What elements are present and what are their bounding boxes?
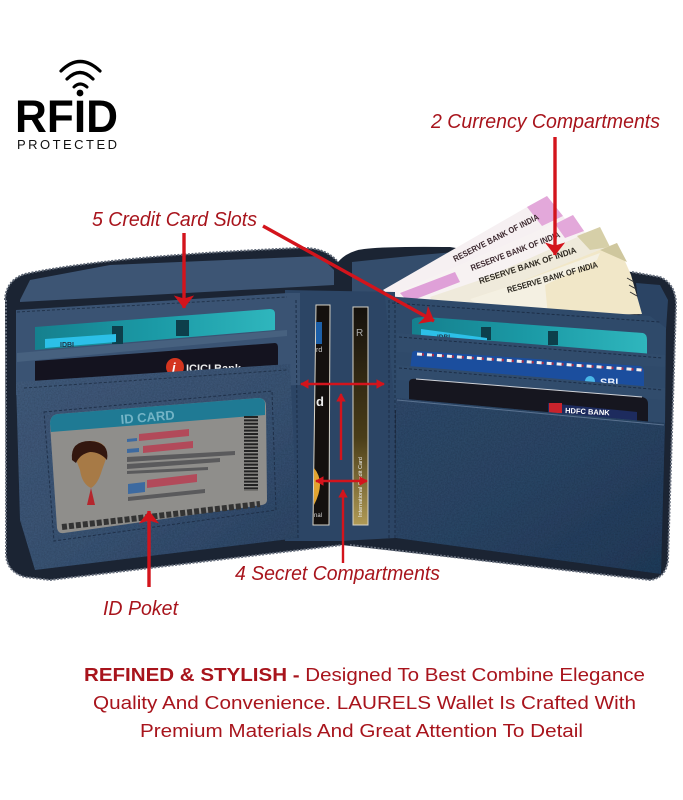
card: teal credit card	[35, 309, 275, 350]
panel: right card slots	[385, 296, 666, 425]
wallet illustration	[5, 196, 676, 580]
label: ID Poket: ID Poket	[103, 598, 179, 620]
label: 4 Secret Compartments: 4 Secret Compartments	[235, 563, 440, 585]
card: black ICICI card: i	[172, 360, 176, 375]
card: teal credit card	[412, 317, 647, 354]
secret compartment card left: nal	[314, 513, 322, 519]
currency notes	[383, 196, 642, 318]
card: black ICICI card: ICICI Bank	[186, 363, 242, 375]
description text: REFINED & STYLISH - Designed To Best Combine Elegance	[84, 664, 645, 685]
label: 5 Credit Card Slots: 5 Credit Card Slots	[92, 209, 257, 231]
logo: RFID protected: PROTECTED	[17, 137, 117, 152]
description text: Premium Materials And Great Attention To Detail	[140, 720, 583, 741]
arrow: right card slots	[263, 226, 434, 321]
card: blue SBI card	[410, 351, 644, 389]
ID window: ID CARD	[120, 407, 175, 427]
secret compartment card left: d	[316, 394, 324, 409]
currency notes: RESERVE BANK OF INDIA	[451, 212, 541, 264]
logo: RFID protected: RFID	[15, 91, 118, 142]
card: teal credit card: IDBI	[437, 334, 450, 341]
ID window	[50, 398, 267, 533]
logo: RFID protected	[15, 62, 118, 152]
arrow: currency	[553, 137, 557, 255]
currency notes: RESERVE BANK OF INDIA	[478, 245, 578, 286]
label: 2 Currency Compartments: 2 Currency Compartments	[430, 111, 660, 133]
description text: Quality And Convenience. LAURELS Wallet Is Crafted With	[93, 692, 636, 713]
panel: inner lining top	[20, 252, 668, 330]
card: black ICICI card	[35, 343, 278, 382]
arrow: ID pocket	[147, 511, 151, 587]
currency notes: RESERVE BANK OF INDIA	[469, 229, 561, 273]
arrow: left card slots	[182, 233, 186, 308]
secret compartment card right: R	[356, 328, 363, 339]
secret compartment card right	[353, 307, 368, 525]
description text	[84, 664, 645, 741]
card: teal credit card: IDBI	[60, 342, 74, 349]
panel: center spine	[285, 290, 396, 541]
panel: left card slots	[16, 293, 300, 395]
card: blue SBI card: SBI	[600, 377, 618, 389]
card: black HDFC card	[409, 379, 648, 422]
panel: right large pocket	[296, 300, 665, 574]
card: black HDFC card: HDFC BANK	[565, 406, 610, 417]
icon: wireless signal	[61, 62, 100, 96]
currency notes: RESERVE BANK OF INDIA	[506, 259, 599, 295]
arrows: secret compartments	[301, 384, 384, 563]
ID portrait	[72, 441, 107, 505]
ID text lines	[62, 416, 260, 527]
secret compartment card right: International Credit Card	[358, 457, 364, 517]
panel: left ID pocket	[16, 364, 298, 570]
secret compartment card left	[313, 305, 330, 525]
zipper outline	[5, 247, 676, 580]
secret compartment card left: rd	[316, 347, 322, 354]
